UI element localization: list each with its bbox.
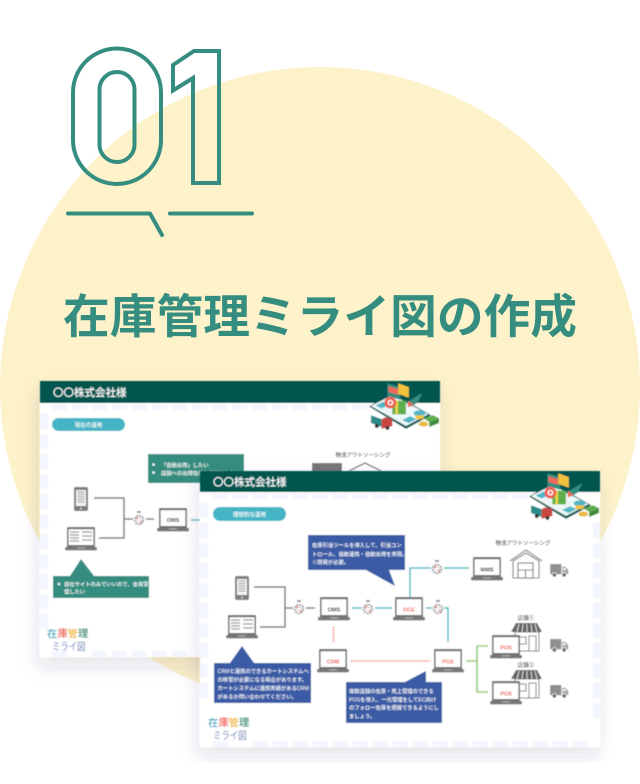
slide 1 lower callout: 自社サイトのみでいいので、会員管: [64, 580, 149, 588]
slide 1 logo: 理: [78, 628, 89, 640]
OCE laptop: [393, 597, 425, 620]
slide 2 laptop icon: [226, 615, 258, 638]
slide 2 logo: [208, 716, 250, 742]
slide 2 hub icons: [295, 560, 442, 613]
blue callout: CRM: [214, 646, 311, 703]
slide 1 OMS laptop: [157, 508, 189, 531]
slide 2 logo: ミライ図: [213, 730, 247, 742]
panel: ideal operation slide: [200, 471, 600, 747]
slide 1 green callout: [148, 454, 244, 483]
slide 1 logo: 管: [68, 628, 78, 640]
CRM laptop: CRM: [327, 660, 340, 666]
slide 2 pill label: 理想的な運用: [233, 510, 266, 518]
store 2 shop and POS: POS: [500, 692, 512, 698]
blue callout: POS: 複数店舗の在庫・売上管理のできる: [349, 687, 434, 695]
store 1 shop and POS: [490, 623, 542, 658]
slide 1 teal connector: [191, 519, 200, 521]
store 1 shop and POS: POS: [500, 646, 512, 652]
panel: current operation slide: [40, 381, 440, 657]
blue callout: CRM: カートシステムに連携実績があるCRM: [218, 684, 309, 692]
slide 1 laptop icon: [65, 527, 97, 550]
outsourcing label: 物流アウトソーシング: [496, 539, 551, 547]
title: 在庫管理ミライ図の作成: [63, 291, 577, 343]
slide 1 green callout: 「自動出荷」したい: [161, 461, 209, 469]
blue callout: POS: ましょう。: [349, 713, 375, 720]
slide 1 green callout: 店舗への出荷指示も自動化したい: [161, 469, 240, 477]
slide 1 lower callout: [53, 559, 149, 598]
slide 2 gray connectors: [254, 587, 315, 627]
slide 1 header title: 〇〇株式会社様: [53, 386, 127, 399]
slide 2 header bar: [200, 471, 600, 492]
slide 2 logo: 管: [228, 716, 239, 730]
slide 1 lower callout: 理したい: [64, 588, 85, 596]
slide 2 phone icon: [235, 576, 249, 600]
slide 1 phone icon: [74, 487, 88, 511]
slide 2 background pattern: [200, 493, 600, 747]
slide 2 pill label: [213, 507, 286, 521]
blue callout: POS: POSを導入、一元管理をしてEC向け: [349, 696, 436, 704]
slide 1 pill label: [52, 418, 125, 431]
slide 2 logo: 理: [239, 717, 250, 729]
store 1 label: 店舗①: [518, 614, 535, 622]
POS laptop: POS: [442, 660, 454, 666]
slide 1 header bar: [40, 381, 440, 403]
slide 1 outsourcing label: 物流アウトソーシング: [336, 451, 391, 459]
slide 1 warehouse and laptop: [312, 463, 381, 473]
slide 1 logo: ミライ図: [52, 641, 86, 653]
slide 1 logo: 在: [47, 628, 57, 640]
slide 2 logo: 庫: [218, 716, 229, 729]
slide 1 logo: [47, 627, 89, 653]
slide 1 background pattern: [40, 404, 367, 657]
blue callout: CRM: CRMと連携のできるカートシステムへ: [218, 667, 309, 675]
blue callout: CRM: の移管が必要になる場合があります。: [218, 676, 307, 684]
blue callout: CRM: があるか問い合わせてください。: [218, 692, 297, 700]
slide 1 pill label: 現在の運用: [75, 421, 102, 429]
WMS laptop: WMS: [480, 568, 494, 574]
speech-bubble underline: [68, 214, 252, 235]
blue callout: POS: [346, 671, 442, 723]
CRM laptop: [317, 649, 349, 672]
store 2 shop and POS: [490, 670, 542, 704]
slide 1 isometric illustration: [369, 383, 439, 430]
WMS laptop: [471, 557, 503, 580]
slide 1 connecting lines: [94, 498, 154, 538]
slide 1 OMS laptop: OMS: [167, 518, 180, 524]
OCE laptop: OCE: [403, 608, 415, 614]
warehouse icon: [510, 550, 542, 578]
slide 2 red dotted links: [334, 627, 430, 661]
blue callout: OCE: [308, 535, 407, 586]
slide 1 logo: 庫: [58, 627, 68, 640]
slide 2 green connector: [466, 646, 488, 692]
slide 2 header title: 〇〇株式会社様: [213, 476, 287, 488]
blue callout: OCE: トロール、自動連携・自動出荷を実現。: [312, 550, 407, 558]
blue callout: OCE: ※開発が必要。: [312, 558, 349, 566]
slide 2 logo: 在: [208, 716, 218, 730]
slide 2 teal connectors: [352, 568, 469, 642]
big number 01: [73, 48, 219, 184]
POS laptop: [432, 649, 464, 672]
slide 2 isometric illustration: [529, 473, 599, 520]
store 2 label: 店舗②: [518, 661, 535, 669]
OMS laptop: OMS: [328, 608, 341, 614]
OMS laptop: [318, 597, 350, 620]
truck icons: [550, 564, 568, 698]
blue callout: OCE: 在庫引当ツールを導入して、引当コン: [312, 541, 402, 549]
slide 1 hub icon: [135, 511, 143, 524]
blue callout: POS: のフォロー在庫を把握できるようにし: [349, 704, 439, 712]
